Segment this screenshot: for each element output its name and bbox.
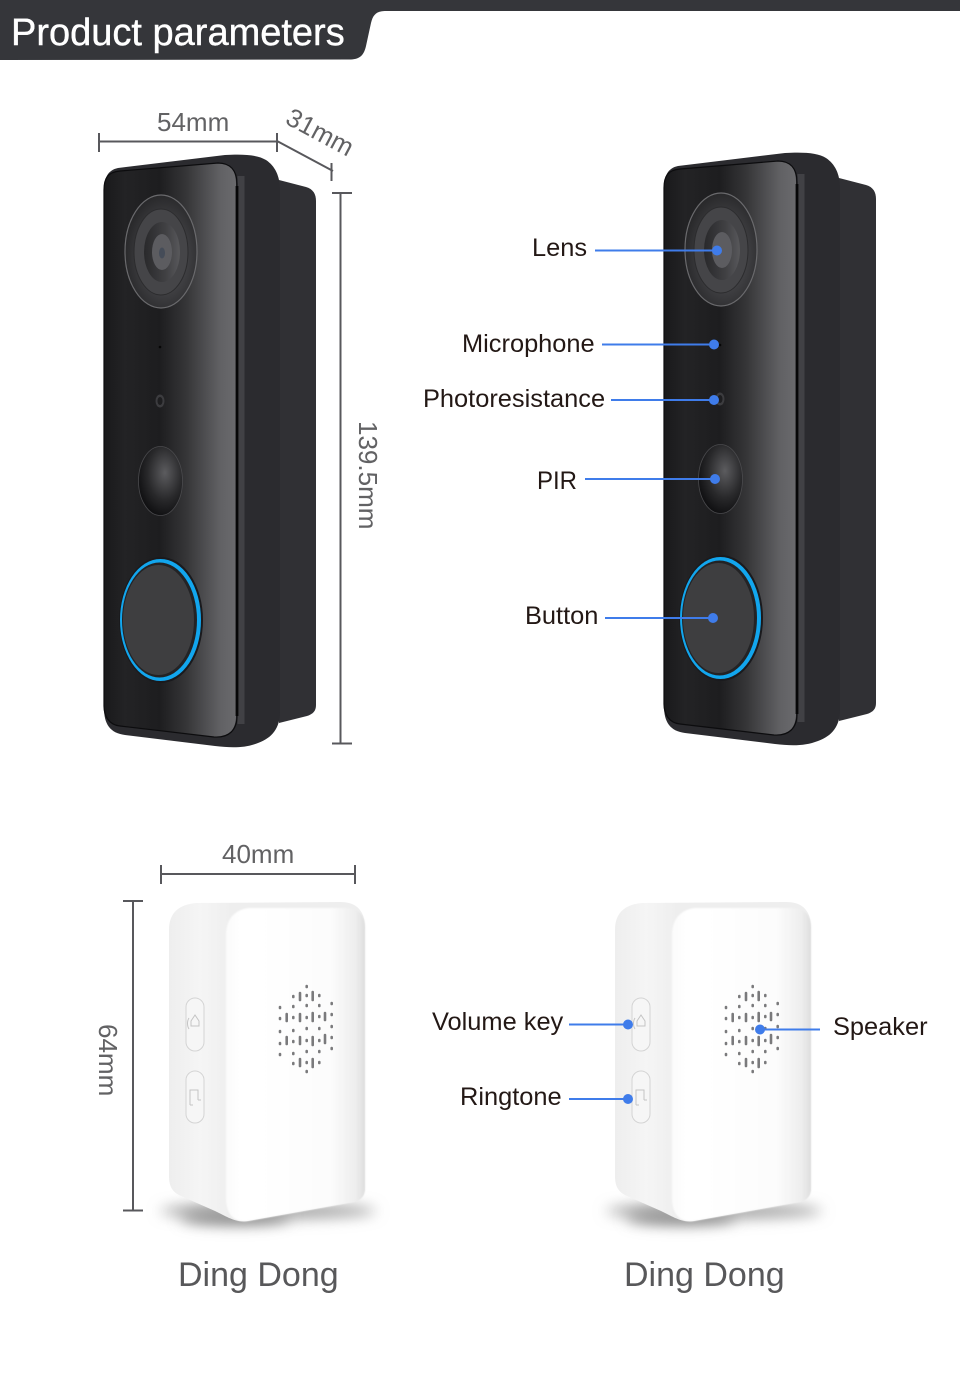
callout: Ringtone: Ringtone	[460, 1083, 562, 1111]
speaker grille	[280, 986, 332, 1072]
dimension: width 40mm: 40mm	[222, 839, 294, 869]
dimension: height 139.5mm: 139.5mm	[353, 421, 383, 529]
callout: Ringtone	[460, 1083, 633, 1111]
callout: Button	[525, 602, 718, 630]
product name: Ding Dong	[178, 1256, 339, 1294]
chime unit	[606, 902, 822, 1225]
callout: Lens	[532, 234, 722, 262]
dimension: height 64mm: 64mm	[93, 1024, 123, 1096]
callout: Photoresistance: Photoresistance	[423, 385, 605, 413]
doorbell with part callouts	[423, 153, 876, 745]
doorbell body	[104, 155, 316, 747]
lens	[125, 195, 197, 308]
dimension: depth 31mm: 31mm	[281, 102, 359, 162]
callout: Speaker	[755, 1013, 928, 1041]
microphone hole	[159, 346, 161, 348]
doorbell body	[664, 153, 876, 745]
callout: Volume key	[432, 1008, 633, 1036]
photoresistance	[156, 394, 164, 408]
dimension: height 139.5mm	[332, 193, 383, 744]
callout: Photoresistance	[423, 385, 719, 413]
ringtone key	[186, 1071, 204, 1123]
volume key	[186, 998, 204, 1051]
chime unit	[160, 902, 376, 1225]
chime with part callouts	[432, 902, 928, 1294]
callout: Speaker: Speaker	[833, 1013, 928, 1041]
callout: Microphone	[462, 330, 719, 358]
PIR sensor	[138, 446, 182, 516]
title: Product parameters	[11, 12, 345, 54]
dimension: width 54mm: 54mm	[157, 107, 229, 137]
chime with dimensions	[93, 839, 376, 1294]
callout: Lens: Lens	[532, 234, 587, 262]
callout: Button: Button	[525, 602, 598, 630]
callout: PIR: PIR	[537, 467, 577, 495]
doorbell with dimensions	[99, 102, 383, 747]
dimension: width 54mm	[99, 107, 277, 152]
header banner	[0, 0, 960, 60]
callout: Volume key: Volume key	[432, 1008, 564, 1036]
dimension: width 40mm	[161, 839, 355, 884]
callout: PIR	[537, 467, 720, 495]
callout: Microphone: Microphone	[462, 330, 595, 358]
doorbell button	[119, 557, 203, 683]
product name: Ding Dong	[624, 1256, 785, 1294]
dimension: height 64mm	[93, 901, 143, 1210]
